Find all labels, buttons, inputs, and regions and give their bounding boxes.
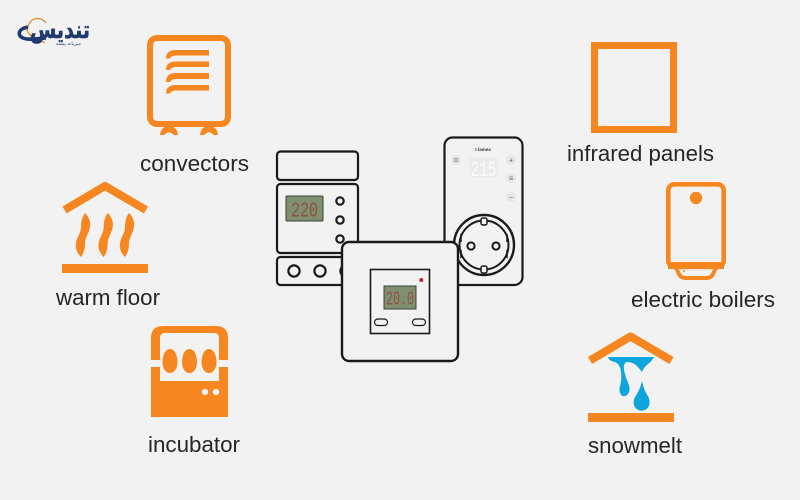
socket bbox=[454, 215, 514, 275]
icon: snowmelt bbox=[588, 336, 674, 422]
device: socket thermostat: + bbox=[509, 158, 513, 164]
icon: infrared panel bbox=[594, 46, 674, 130]
label: incubator: incubator bbox=[148, 432, 240, 457]
logo bbox=[19, 16, 90, 47]
device: socket thermostat bbox=[444, 138, 522, 285]
icon: incubator bbox=[151, 326, 228, 417]
logo: تندیس bbox=[30, 16, 90, 44]
relay display: 220 bbox=[291, 200, 318, 224]
label: snowmelt: snowmelt bbox=[588, 433, 682, 458]
device: socket thermostat: t lamea bbox=[475, 147, 491, 152]
label: electric boilers: electric boilers bbox=[631, 287, 775, 312]
label: convectors: convectors bbox=[140, 151, 249, 176]
label: infrared panels: infrared panels bbox=[567, 141, 714, 166]
icon: warm floor bbox=[62, 186, 148, 273]
device: socket thermostat: ≡ bbox=[509, 176, 513, 182]
icon: electric boiler bbox=[668, 184, 724, 278]
device: wall thermostat bbox=[342, 242, 458, 361]
device: din-rail voltage relay bbox=[277, 152, 358, 285]
thermostat display: 20.0 bbox=[386, 288, 414, 310]
icon: convector bbox=[150, 38, 228, 135]
device: socket thermostat: − bbox=[509, 194, 513, 202]
logo: میزبانه پیشه bbox=[56, 42, 82, 47]
label: warm floor: warm floor bbox=[55, 285, 160, 310]
device: socket thermostat: 215 bbox=[470, 160, 496, 183]
